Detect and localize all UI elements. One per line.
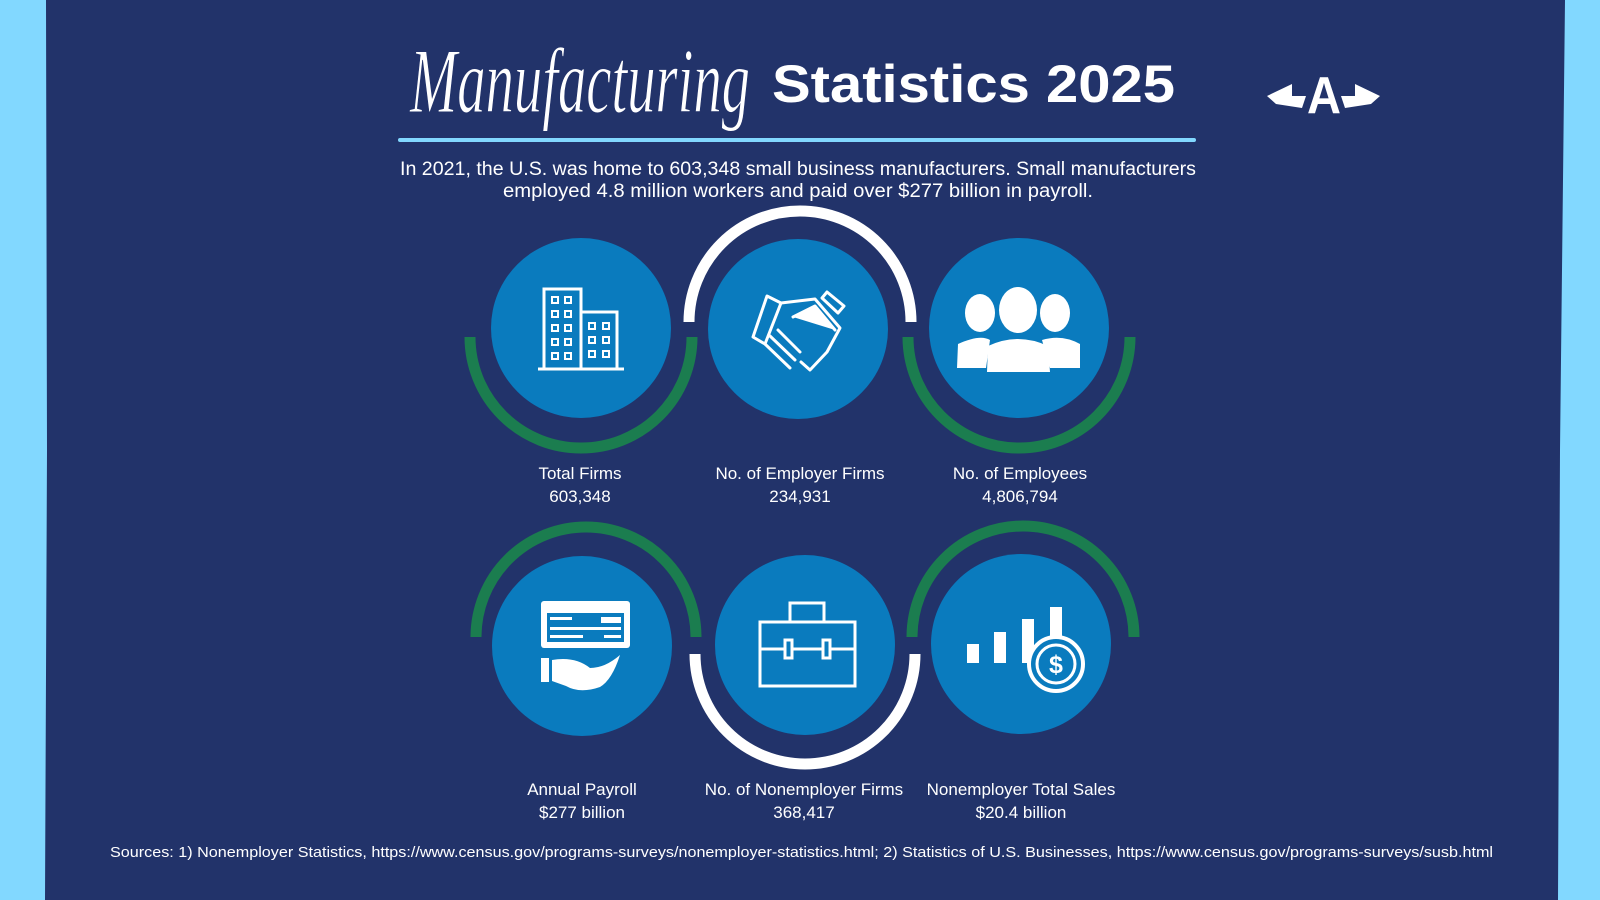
stat: employer firms: 234,931 xyxy=(769,487,831,506)
stat: total firms xyxy=(470,238,692,506)
icon: building xyxy=(538,289,624,369)
icon: check in hand xyxy=(541,601,630,690)
subtitle xyxy=(400,159,1196,202)
stat: nonemployer sales xyxy=(912,526,1134,822)
icon: handshake xyxy=(753,292,844,370)
stat: nonemployer sales: Nonemployer Total Sales xyxy=(927,780,1115,799)
stat: employer firms xyxy=(689,211,911,506)
icon: chart with coin xyxy=(967,607,1083,691)
stat: nonemployer firms: No. of Nonemployer Firms xyxy=(705,780,903,799)
stat: annual payroll: $277 billion xyxy=(539,803,625,822)
logo xyxy=(1267,67,1380,125)
icon: chart with coin: $ xyxy=(1049,651,1063,679)
stat: annual payroll: Annual Payroll xyxy=(527,780,637,799)
stat: total firms: 603,348 xyxy=(549,487,611,506)
underline xyxy=(398,138,1196,142)
stat: nonemployer firms xyxy=(695,555,915,822)
stat: employees: 4,806,794 xyxy=(982,487,1058,506)
stat: nonemployer sales: $20.4 billion xyxy=(976,803,1066,822)
subtitle: In 2021, the U.S. was home to 603,348 small business manufacturers. Small manufacturers xyxy=(400,159,1196,180)
stat: nonemployer firms: 368,417 xyxy=(773,803,835,822)
title: Statistics 2025 xyxy=(772,55,1175,114)
logo: A xyxy=(1307,67,1341,125)
icon: people xyxy=(957,287,1080,372)
stat: annual payroll xyxy=(476,527,696,822)
stat: total firms: Total Firms xyxy=(538,464,622,483)
title: Manufacturing xyxy=(409,30,750,132)
sources: Sources: 1) Nonemployer Statistics, https://www.census.gov/programs-surveys/nonemployer-statistics.html; 2) Statistics of U.S. Businesses, https://www.census.gov/programs-surveys/susb.html xyxy=(110,844,1493,861)
subtitle: employed 4.8 million workers and paid over $277 billion in payroll. xyxy=(503,181,1093,202)
stat: employer firms: No. of Employer Firms xyxy=(715,464,885,483)
stat: employees xyxy=(908,238,1130,506)
stat: employees: No. of Employees xyxy=(953,464,1087,483)
icon: briefcase xyxy=(760,603,855,686)
